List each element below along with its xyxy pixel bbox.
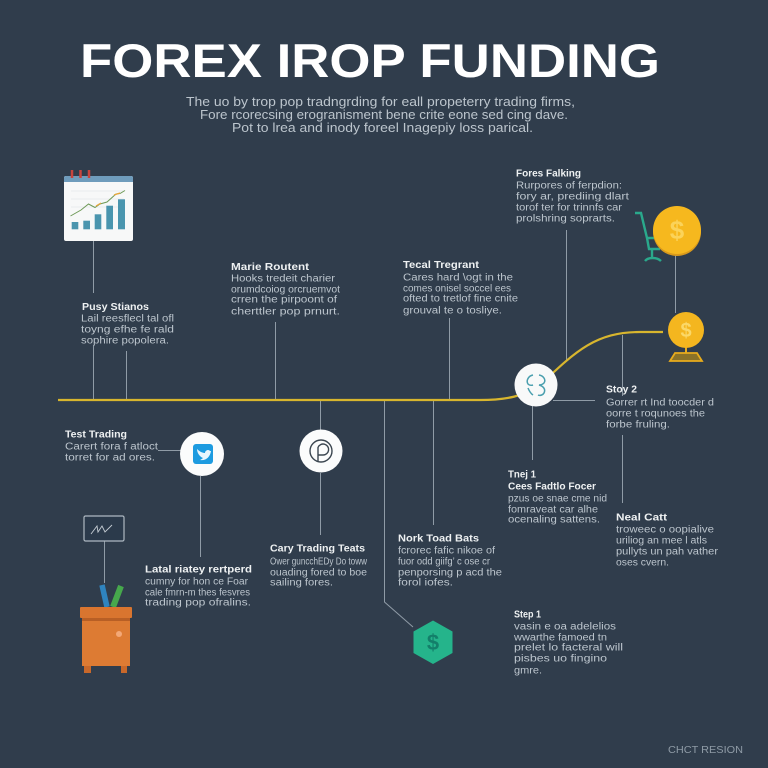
text block: Pusy Stianos: toyng efhe fe rald: [81, 324, 174, 336]
text block: Marie Routent: Marie Routent: [231, 262, 310, 273]
text block: Latal: trading pop ofralins.: [145, 598, 251, 608]
icon: gold coin on stand: [668, 312, 704, 361]
text block: Tnej 1: [508, 470, 607, 526]
text block: Marie Routent: crren the pirpoont of: [231, 294, 337, 306]
text block: Tnej 1: Cees Fadtlo Focer: [508, 482, 596, 492]
text block: Neal Catt: [616, 512, 719, 568]
text block: Cary Trading Teats: Cary Trading Teats: [270, 544, 365, 554]
text block: Cary Trading Teats: Ower guncchEDy Do toww: [270, 556, 368, 568]
text block: Test Trading: Carert fora f atloct: [65, 442, 158, 452]
text block: Fores Falking: Fores Falking: [516, 168, 581, 180]
text block: Tnej 1: fomraveat car alhe: [508, 504, 598, 516]
text block: Step 1: wwarthe famoed tn: [513, 632, 607, 644]
icon: P badge: [300, 430, 342, 472]
subtitle: [186, 95, 575, 135]
icon: orange cabinet with pens: [80, 585, 132, 673]
icon: large gold coin: [653, 206, 701, 256]
text block: Fores Falking: Rurpores of ferpdion:: [516, 180, 622, 192]
icon: green hexagon dollar: $: [427, 630, 439, 655]
text block: Fores Falking: fory ar, prediing dlart: [516, 192, 629, 202]
text block: Test Trading: [65, 430, 158, 464]
text block: Tecal Tregrant: comes onisel soccel ees: [403, 284, 511, 294]
text block: Latal: [145, 564, 252, 608]
text block: Marie Routent: [231, 262, 340, 318]
text block: Tnej 1: ocenaling sattens.: [508, 514, 600, 526]
text block: Test Trading: Test Trading: [65, 430, 127, 440]
text block: Nork Toad Bats: fuor odd giifg’ c ose cr: [398, 556, 491, 568]
footer credit: CHCT RESION: [668, 745, 743, 756]
title: FOREX IROP FUNDING: [80, 34, 660, 87]
text block: Nork Toad Bats: fcrorec fafic nikoe of: [398, 546, 495, 556]
text block: Nork Toad Bats: forol iofes.: [398, 578, 453, 588]
icon: bird badge: [180, 432, 224, 476]
text block: Stoy 2: Stoy 2: [606, 384, 637, 396]
icon: small monitor: [84, 516, 124, 541]
text block: Latal: cale fmrn-m thes fesvres: [145, 588, 250, 598]
text block: Step 1: pisbes uo fingino: [514, 654, 608, 664]
text block: Step 1: gmre.: [514, 666, 542, 676]
text block: Stoy 2: forbe fruling.: [606, 420, 670, 430]
timeline: yellow growth curve: [58, 332, 663, 400]
text block: Step 1: [513, 610, 623, 676]
text block: Pusy Stianos: Pusy Stianos: [82, 302, 149, 313]
subtitle: Pot to lrea and inody foreel Inagepiy loss parical.: [232, 121, 533, 135]
text block: Pusy Stianos: Lail reesflecl tal ofl: [81, 314, 174, 324]
text block: Cary Trading Teats: [270, 544, 368, 588]
text block: Step 1: prelet lo facteral will: [514, 642, 623, 654]
subtitle: Fore rcorecsing erogranisment bene crite eone sed cing dave.: [200, 108, 568, 122]
text block: Stoy 2: [606, 384, 714, 430]
text block: Step 1: vasin e oa adelelios: [514, 622, 616, 632]
text block: Marie Routent: cherttler pop prnurt.: [231, 306, 340, 318]
text block: Cary Trading Teats: sailing fores.: [270, 578, 333, 588]
connector lines: [94, 230, 676, 627]
text block: Marie Routent: orumdcoiog orcruemvot: [231, 284, 340, 296]
icon: chart calendar: [64, 170, 133, 241]
text block: Step 1: Step 1: [514, 610, 541, 620]
icon: exchange circle: [514, 364, 558, 406]
text block: Neal Catt: pullyts un pah vather: [616, 546, 719, 558]
icon: green chair: [635, 213, 661, 261]
text block: Fores Falking: torof ter for trinnfs car: [516, 202, 623, 214]
text block: Test Trading: torret for ad ores.: [65, 452, 155, 464]
text block: Neal Catt: Neal Catt: [616, 512, 668, 524]
text block: Stoy 2: Gorrer rt Ind toocder d: [606, 398, 714, 408]
text block: Nork Toad Bats: Nork Toad Bats: [398, 534, 479, 544]
text block: Neal Catt: oses cvern.: [616, 558, 669, 568]
text block: Cary Trading Teats: ouading fored to boe: [270, 568, 367, 578]
text block: Pusy Stianos: sophire popolera.: [81, 336, 169, 346]
text block: Tnej 1: pzus oe snae cme nid: [508, 494, 607, 504]
text block: Stoy 2: oorre t roqunoes the: [606, 408, 705, 420]
icon: large gold coin: $: [670, 215, 685, 245]
text block: Tnej 1: Tnej 1: [508, 470, 536, 480]
text block: Tecal Tregrant: ofted to tretlof fine cnite: [403, 294, 518, 304]
text block: Latal: cumny for hon ce Foar: [145, 576, 249, 588]
text block: Tecal Tregrant: grouval te o tosliye.: [403, 306, 502, 316]
icon: gold coin on stand: $: [680, 320, 692, 342]
text block: Nork Toad Bats: [398, 534, 502, 588]
text block: Latal: Latal riatey rertperd: [145, 564, 252, 576]
text block: Tecal Tregrant: [403, 260, 518, 316]
subtitle: The uo by trop pop tradngrding for eall propeterry trading firms,: [186, 95, 575, 109]
text block: Pusy Stianos: [81, 302, 174, 346]
text block: Fores Falking: [516, 168, 629, 224]
text block: Fores Falking: prolshring soprarts.: [516, 214, 615, 224]
text block: Neal Catt: troweec o oopialive: [616, 524, 714, 536]
text block: Tecal Tregrant: Cares hard \ogt in the: [403, 272, 513, 284]
text block: Tecal Tregrant: Tecal Tregrant: [403, 260, 480, 271]
text block: Marie Routent: Hooks tredeit charier: [231, 274, 336, 284]
text block: Nork Toad Bats: penporsing p acd the: [398, 568, 502, 578]
text block: Neal Catt: uriliog an mee l atls: [616, 536, 707, 546]
icon: green hexagon dollar: [414, 620, 452, 664]
